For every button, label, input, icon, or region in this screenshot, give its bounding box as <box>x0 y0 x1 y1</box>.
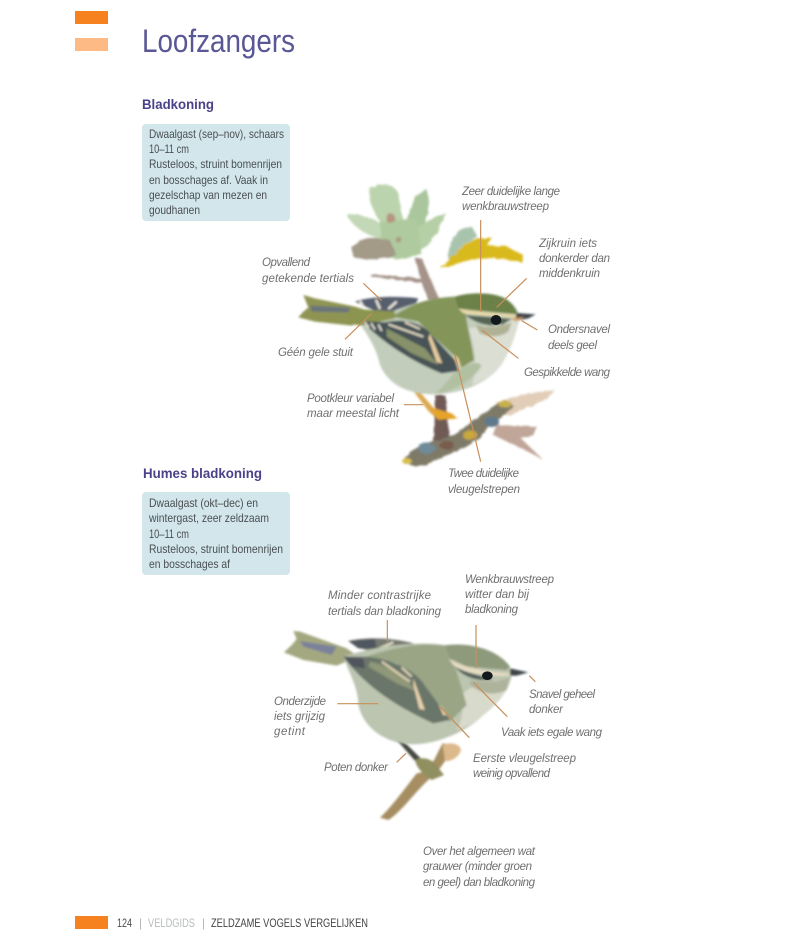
labels: Bladkoning: Ondersnavel <box>548 324 610 336</box>
labels: Bladkoning: Gespikkelde wang <box>524 367 611 379</box>
labels: Bladkoning: wenkbrauwstreep <box>462 201 550 213</box>
eye <box>491 315 501 325</box>
tail <box>284 631 358 666</box>
labels: Humes bladkoning: Vaak iets egale wang <box>501 727 603 739</box>
footer text: 124 <box>117 916 132 930</box>
labels: Humes bladkoning: Wenkbrauwstreep <box>465 574 555 586</box>
labels: Humes bladkoning: weinig opvallend <box>473 768 551 780</box>
footer text: ZELDZAME VOGELS VERGELIJKEN <box>211 916 368 930</box>
labels: Humes bladkoning: Over het algemeen wat <box>423 846 536 858</box>
labels: Humes bladkoning: en geel) dan bladkoning <box>423 877 536 889</box>
header tab: light orange <box>75 38 108 51</box>
flank <box>435 363 481 394</box>
info box: Humes bladkoning: wintergast, zeer zeldzaam <box>148 511 269 525</box>
leader lines <box>345 220 537 462</box>
wing <box>362 321 458 373</box>
info box: Humes bladkoning: 10–11 cm <box>149 527 189 541</box>
info box: Humes bladkoning <box>142 492 290 575</box>
labels: Humes bladkoning: witter dan bij <box>465 589 529 601</box>
breast <box>457 680 510 730</box>
lower branch <box>402 390 555 466</box>
labels: Humes bladkoning: grauwer (minder groen <box>423 861 532 873</box>
leg and foot <box>413 391 457 420</box>
footer text: VELDGIDS <box>148 916 195 930</box>
labels: Bladkoning: middenkruin <box>539 268 600 280</box>
footer text: | <box>202 916 205 930</box>
tertials <box>355 297 418 312</box>
info box: Bladkoning: Dwaalgast (sep–nov), schaars <box>149 127 284 141</box>
cheek <box>470 678 510 694</box>
crown <box>455 293 518 314</box>
title: Loofzangers <box>142 23 295 59</box>
labels: Humes bladkoning <box>274 574 603 889</box>
info box: Bladkoning <box>142 124 290 221</box>
tail <box>298 295 377 326</box>
bill <box>510 668 528 676</box>
labels: Humes bladkoning: bladkoning <box>465 604 519 616</box>
body <box>362 293 520 394</box>
crown <box>445 645 510 670</box>
labels: Humes bladkoning: Minder contrastrijke <box>328 590 431 602</box>
leader lines <box>337 620 535 762</box>
info box: Bladkoning: Rusteloos, struint bomenrijen <box>149 157 282 171</box>
labels: Bladkoning: Pootkleur variabel <box>307 393 394 405</box>
labels: Bladkoning: vleugelstrepen <box>448 484 520 496</box>
labels: Bladkoning: Zijkruin iets <box>538 238 597 250</box>
labels: Humes bladkoning: donker <box>529 704 564 716</box>
eye stripe <box>465 315 512 326</box>
rump <box>345 308 395 326</box>
eye <box>482 671 493 680</box>
bird <box>298 293 536 420</box>
info box: Humes bladkoning: Dwaalgast (okt–dec) en <box>149 496 258 510</box>
labels: Humes bladkoning: iets grijzig <box>274 711 326 723</box>
info box: Bladkoning: 10–11 cm <box>149 142 189 156</box>
labels: Bladkoning: Zeer duidelijke lange <box>461 186 560 198</box>
labels: Humes bladkoning: tertials dan bladkoning <box>328 606 442 618</box>
wing <box>343 657 450 723</box>
heading: Bladkoning: Bladkoning <box>142 96 214 112</box>
leaves and twig <box>347 185 523 302</box>
mantle <box>392 297 474 368</box>
labels: Humes bladkoning: Eerste vleugelstreep <box>473 753 577 765</box>
cheek <box>475 322 512 336</box>
supercilium <box>458 308 518 318</box>
labels: Bladkoning: Opvallend <box>262 257 311 269</box>
info box: Bladkoning: goudhanen <box>149 203 200 217</box>
labels: Bladkoning: Twee duidelijke <box>448 468 519 480</box>
mantle <box>367 644 467 722</box>
labels: Bladkoning: donkerder dan <box>539 253 610 265</box>
bird <box>284 631 528 744</box>
labels: Humes bladkoning: Onderzijde <box>274 696 326 708</box>
eye stripe <box>455 667 493 680</box>
body <box>343 643 512 744</box>
labels: Bladkoning <box>262 186 611 496</box>
labels: Bladkoning: Géén gele stuit <box>278 347 354 359</box>
illustration: Humes bladkoning on branch <box>284 620 535 820</box>
footer text <box>117 916 368 930</box>
info box: Bladkoning: en bosschages af. Vaak in <box>149 173 268 187</box>
supercilium <box>448 658 510 676</box>
info box: Bladkoning: gezelschap van mezen en <box>149 188 267 202</box>
footer text: | <box>139 916 142 930</box>
heading: Humes bladkoning: Humes bladkoning <box>143 465 262 481</box>
labels: Bladkoning: getekende tertials <box>262 273 354 285</box>
labels: Humes bladkoning: getint <box>274 726 306 738</box>
labels: Bladkoning: deels geel <box>548 340 597 352</box>
labels: Humes bladkoning: Poten donker <box>324 762 389 774</box>
breast <box>468 318 520 385</box>
info box: Humes bladkoning: Rusteloos, struint bomenrijen <box>149 542 283 556</box>
labels: Bladkoning: maar meestal licht <box>307 408 400 420</box>
footer tab: orange <box>75 916 108 929</box>
illustration: Bladkoning with leaves and branch <box>298 185 555 466</box>
bill <box>515 313 536 321</box>
labels: Humes bladkoning: Snavel geheel <box>529 689 595 701</box>
header tab: orange <box>75 11 108 24</box>
info box: Humes bladkoning: en bosschages af <box>149 557 231 571</box>
tertials <box>348 638 413 657</box>
branch and feet <box>380 739 461 820</box>
